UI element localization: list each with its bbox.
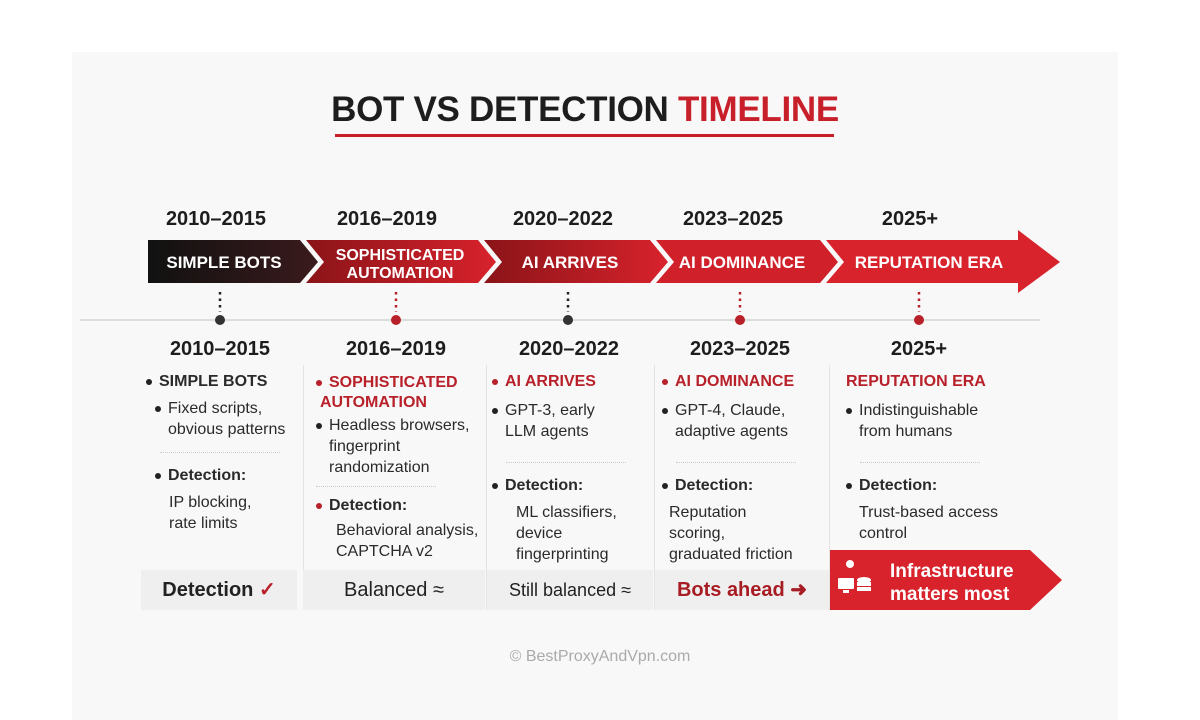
column 1: Fixed scripts, <box>168 400 262 417</box>
column 4: adaptive agents <box>675 423 788 440</box>
bottom years <box>170 338 947 360</box>
column 1: IP blocking, <box>169 494 251 511</box>
text: 2016–2019 <box>337 208 437 230</box>
column 4: graduated friction <box>669 546 793 563</box>
column 2: CAPTCHA v2 <box>336 543 433 560</box>
column 3: fingerprinting <box>516 546 608 563</box>
column 1: rate limits <box>169 515 237 532</box>
column 1: Detection: <box>168 467 246 484</box>
column 4: GPT-4, Claude, <box>675 402 785 419</box>
column 2: Detection: <box>329 497 407 514</box>
column 4: Detection: <box>675 477 753 494</box>
footer watermark: © BestProxyAndVpn.com <box>510 648 690 665</box>
column 1: SIMPLE BOTS <box>159 373 267 390</box>
text: 2025+ <box>891 338 947 360</box>
arrow band: REPUTATION ERA <box>855 253 1003 272</box>
text: Still balanced ≈ <box>509 580 631 600</box>
arrow band: AI DOMINANCE <box>679 253 805 272</box>
text: 2016–2019 <box>346 338 446 360</box>
column 4: scoring, <box>669 525 725 542</box>
column 3: GPT-3, early <box>505 402 595 419</box>
text: Detection ✓ <box>162 579 276 601</box>
text: 2020–2022 <box>519 338 619 360</box>
status row <box>141 570 829 610</box>
text: Bots ahead ➜ <box>677 579 807 601</box>
column 3: LLM agents <box>505 423 589 440</box>
column 5: Trust-based access <box>859 504 998 521</box>
column 2: fingerprint <box>329 438 400 455</box>
column 5 <box>846 373 998 542</box>
column 4: AI DOMINANCE <box>675 373 794 390</box>
column 5: control <box>859 525 907 542</box>
callout: infrastructure: Infrastructure <box>890 561 1014 582</box>
column 3: AI ARRIVES <box>505 373 596 390</box>
arrow band: AUTOMATION <box>347 265 453 282</box>
text: 2010–2015 <box>170 338 270 360</box>
column 3 <box>492 373 626 563</box>
text: 2020–2022 <box>513 208 613 230</box>
arrow band: AI ARRIVES <box>522 253 618 272</box>
text: 2010–2015 <box>166 208 266 230</box>
title: BOT VS DETECTION TIMELINE <box>331 90 839 129</box>
column 5: REPUTATION ERA <box>846 373 986 390</box>
top years <box>166 208 938 230</box>
column 3: ML classifiers, <box>516 504 617 521</box>
column 2: SOPHISTICATED <box>329 374 458 391</box>
column 2 <box>316 374 478 560</box>
column 2: randomization <box>329 459 430 476</box>
column 3: device <box>516 525 562 542</box>
column 5: from humans <box>859 423 952 440</box>
callout: infrastructure <box>830 550 1062 610</box>
column 5: Indistinguishable <box>859 402 978 419</box>
arrow band: SIMPLE BOTS <box>166 253 282 272</box>
text: 2025+ <box>882 208 938 230</box>
arrow band: SOPHISTICATED <box>336 247 464 264</box>
text: 2023–2025 <box>690 338 790 360</box>
column 2: Behavioral analysis, <box>336 522 478 539</box>
column 1 <box>146 373 285 532</box>
column 3: Detection: <box>505 477 583 494</box>
text: Balanced ≈ <box>344 579 444 601</box>
column 4: Reputation <box>669 504 746 521</box>
column 1: obvious patterns <box>168 421 285 438</box>
callout: infrastructure: matters most <box>890 584 1010 605</box>
text: 2023–2025 <box>683 208 783 230</box>
column 5: Detection: <box>859 477 937 494</box>
column 2: AUTOMATION <box>320 394 427 411</box>
column 4 <box>662 373 796 563</box>
column 2: Headless browsers, <box>329 417 470 434</box>
